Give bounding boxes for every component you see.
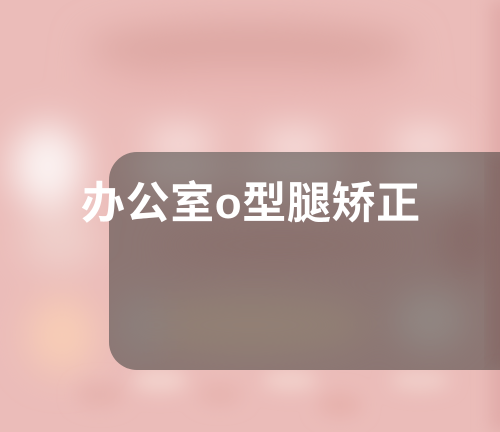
panel: translucent dark rounded banner — [109, 152, 500, 370]
title: 办公室o型腿矫正 — [81, 179, 421, 228]
